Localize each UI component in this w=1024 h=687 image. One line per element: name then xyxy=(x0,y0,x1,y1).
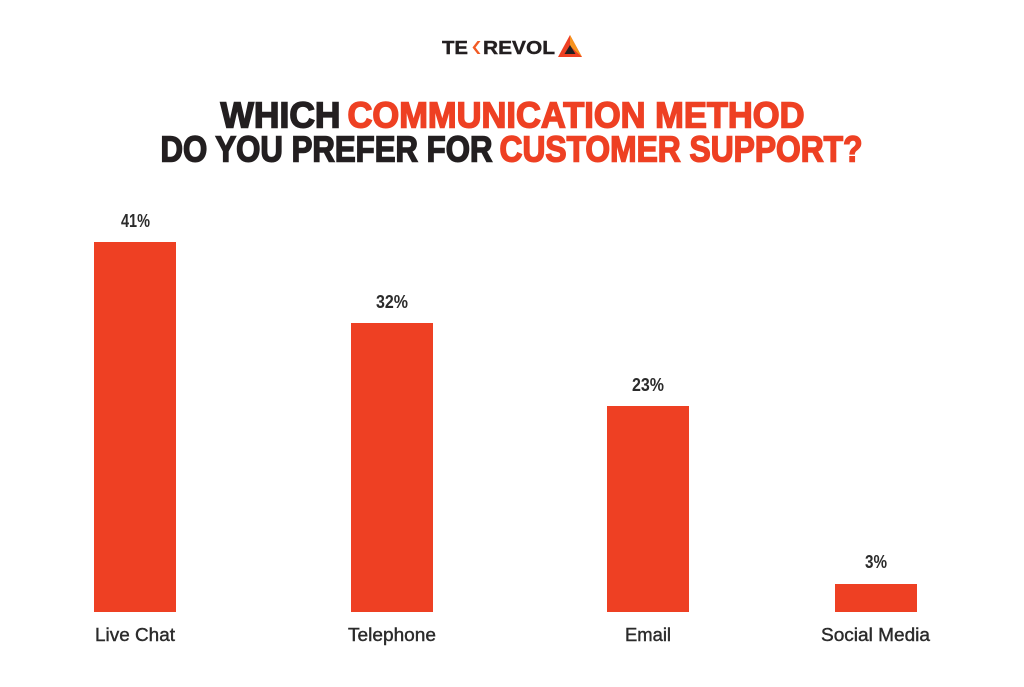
bar: Live Chat 41%: Live Chat xyxy=(95,625,175,645)
bar: Social Media 3%: 3% xyxy=(865,552,887,572)
bar: Telephone 32% xyxy=(348,292,436,645)
bar: Live Chat 41% xyxy=(94,211,176,645)
logo wordmark: TE xyxy=(442,38,468,58)
bar: Email 23%: Email xyxy=(625,625,671,645)
bar chart xyxy=(94,211,931,645)
logo wordmark: REVOL xyxy=(483,38,555,58)
logo triangle icon xyxy=(558,35,582,57)
bar: Telephone 32%: Telephone xyxy=(348,625,436,645)
bar: Telephone 32%: 32% xyxy=(376,292,408,312)
logo wordmark xyxy=(442,38,555,58)
title line 2 xyxy=(160,128,862,170)
title line 2: DO YOU PREFER FOR xyxy=(160,128,492,170)
bar: Live Chat 41%: 41% xyxy=(121,211,150,231)
logo: Tekrevol xyxy=(442,35,582,58)
bar: Email 23% xyxy=(607,375,689,645)
title line 1: COMMUNICATION METHOD xyxy=(348,94,804,136)
title line 2: CUSTOMER SUPPORT? xyxy=(500,128,862,170)
bar: Email 23%: 23% xyxy=(632,375,664,395)
title xyxy=(160,94,862,170)
title line 1: WHICH xyxy=(220,94,340,136)
bar: Social Media 3% xyxy=(821,552,931,645)
bar: Social Media 3%: Social Media xyxy=(821,625,931,645)
